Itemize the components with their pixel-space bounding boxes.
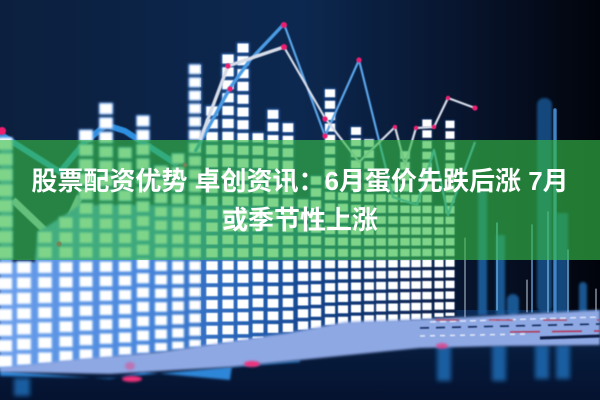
bar wall of square cells: [5, 44, 450, 369]
floor: [0, 310, 600, 382]
thick left chart lines behind the wall: [0, 125, 178, 243]
green title band: [0, 140, 600, 260]
thin pin lines at right: [465, 110, 596, 320]
title: [31, 166, 569, 235]
line chart markers: [0, 22, 478, 247]
reflections under floor: [14, 345, 570, 396]
blurred blue columns at right: [478, 98, 587, 316]
line chart: thin lines over the wall: [195, 24, 475, 215]
wall backing glow: [0, 140, 455, 371]
title: 股票配资优势 卓创资讯：6月蛋价先跌后涨 7月: [31, 166, 569, 196]
title: 或季节性上涨: [222, 205, 378, 235]
